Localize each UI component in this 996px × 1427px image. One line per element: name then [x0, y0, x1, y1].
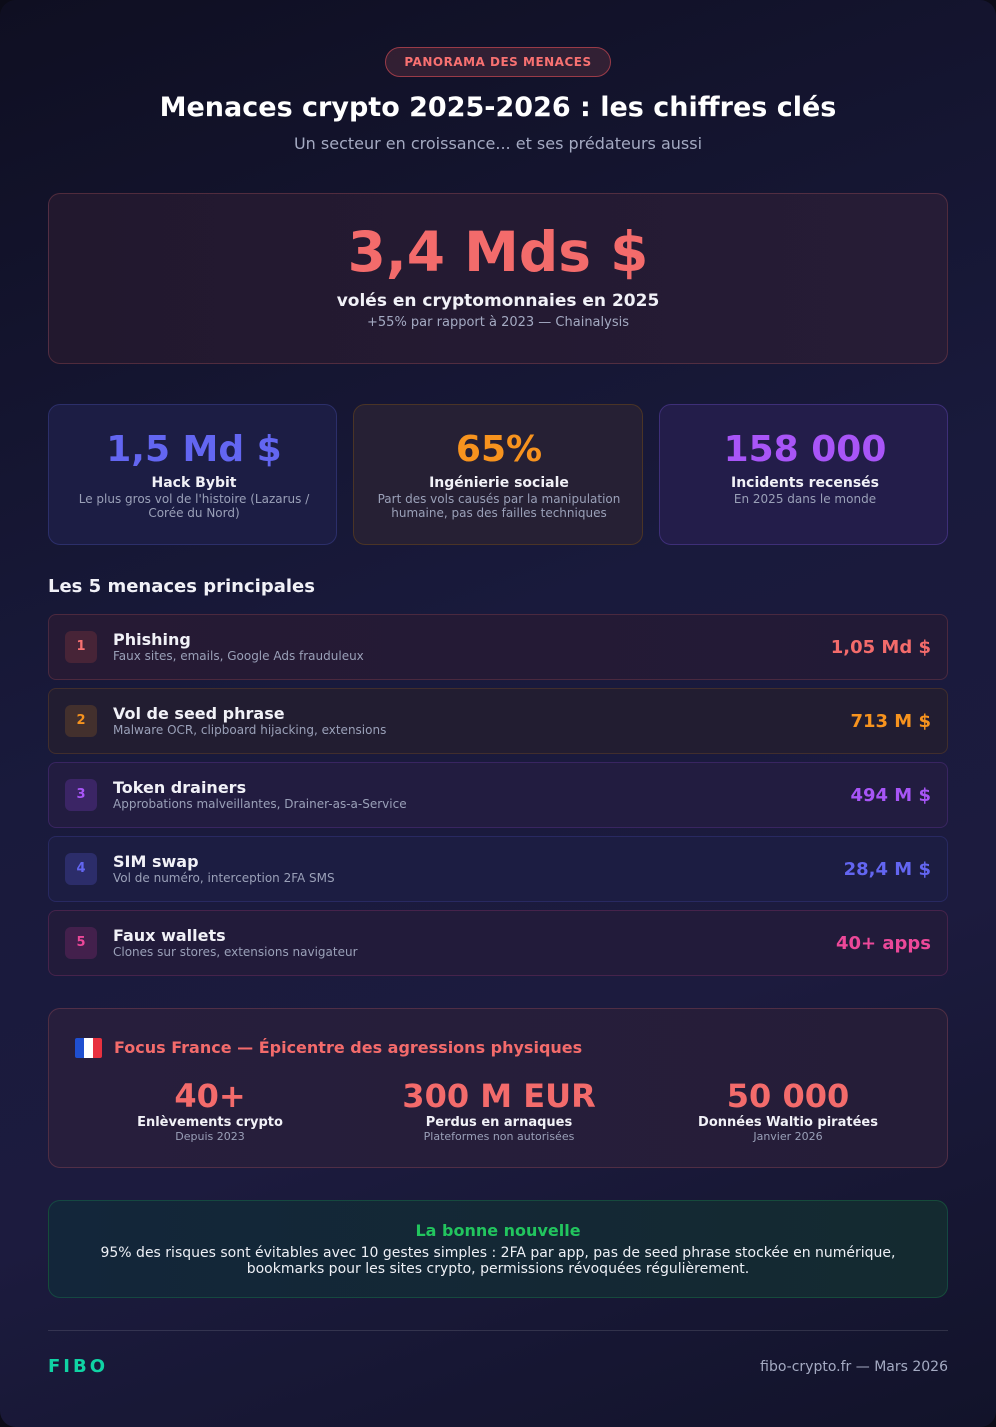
threat 2: 713 M $ — [850, 711, 931, 732]
threat 5: Clones sur stores, extensions navigateur — [113, 945, 358, 959]
threat 1: Faux sites, emails, Google Ads frauduleux — [113, 649, 364, 663]
card: Incidents: 158 000 — [724, 429, 886, 470]
panel: Focus France: Enlèvements crypto — [137, 1115, 283, 1130]
threat 4: Vol de numéro, interception 2FA SMS — [113, 871, 335, 885]
panel: Focus France: Depuis 2023 — [175, 1130, 245, 1143]
threat 4: SIM swap — [113, 852, 199, 871]
panel: Focus France: Plateformes non autorisées — [424, 1130, 574, 1143]
panel: good news: La bonne nouvelle — [415, 1221, 581, 1240]
threat 1: Phishing — [113, 630, 191, 649]
card: Incidents — [659, 404, 948, 545]
threat 2: Vol de seed phrase — [113, 704, 285, 723]
card: Incidents: En 2025 dans le monde — [734, 492, 876, 506]
footer source: fibo-crypto.fr — Mars 2026 — [760, 1359, 948, 1375]
threat 3: Token drainers — [113, 778, 246, 797]
card: Hack Bybit: Hack Bybit — [152, 475, 236, 491]
threat 3: 494 M $ — [850, 785, 931, 806]
threat 1: 1 — [76, 639, 86, 654]
card: Hack Bybit: Le plus gros vol de l'histoire (Lazarus / Corée du Nord) — [79, 492, 309, 520]
panel: good news: 95% des risques sont évitables avec 10 gestes simples : 2FA par app, pas de seed phrase stockée en numérique, bookmarks pour les sites crypto, permissions révoquées régulièrement. — [100, 1245, 896, 1277]
threat 2: 2 — [76, 713, 86, 728]
threat 4: 4 — [76, 861, 86, 876]
card: Ingénierie sociale: Part des vols causés par la manipulation humaine, pas des failles techniques — [378, 492, 620, 520]
threat 3: 3 — [76, 787, 86, 802]
footer logo: FIBO — [48, 1356, 108, 1377]
card: Ingénierie sociale: Ingénierie sociale — [429, 475, 569, 491]
panel: Focus France: Janvier 2026 — [753, 1130, 823, 1143]
subtitle: Un secteur en croissance... et ses prédateurs aussi — [294, 134, 702, 153]
threat 3: Approbations malveillantes, Drainer-as-a-Service — [113, 797, 407, 811]
threat 5: 40+ apps — [836, 933, 931, 954]
threat 3 — [48, 762, 948, 828]
threat 2: Malware OCR, clipboard hijacking, extensions — [113, 723, 386, 737]
hero stat panel: 3,4 Mds $ — [348, 220, 648, 284]
hero stat panel: volés en cryptomonnaies en 2025 — [337, 291, 659, 311]
panel: Focus France — [48, 1008, 948, 1168]
threat 5 — [48, 910, 948, 976]
threat 2 — [48, 688, 948, 754]
threat 4 — [48, 836, 948, 902]
panel: Focus France: Données Waltio piratées — [698, 1115, 878, 1130]
icon: French flag — [75, 1038, 102, 1058]
panel: Focus France: 40+ — [174, 1077, 246, 1115]
pill label — [385, 47, 611, 77]
threat 1 — [48, 614, 948, 680]
card: Incidents: Incidents recensés — [731, 475, 879, 491]
threat 1: 1,05 Md $ — [831, 637, 931, 658]
title: Menaces crypto 2025-2026 : les chiffres clés — [160, 92, 836, 123]
section heading: Les 5 menaces principales — [48, 576, 315, 597]
pill label: PANORAMA DES MENACES — [404, 55, 592, 69]
card: Ingénierie sociale: 65% — [456, 429, 542, 470]
panel: good news — [48, 1200, 948, 1298]
threat 5: Faux wallets — [113, 926, 226, 945]
panel: Focus France: Focus France — Épicentre des agressions physiques — [114, 1038, 582, 1057]
card: Ingénierie sociale — [353, 404, 643, 545]
threat 5: 5 — [76, 935, 86, 950]
panel: Focus France: 300 M EUR — [402, 1077, 596, 1115]
card: Hack Bybit: 1,5 Md $ — [106, 429, 282, 470]
hero stat panel: +55% par rapport à 2023 — Chainalysis — [367, 315, 629, 330]
panel: Focus France: 50 000 — [727, 1077, 849, 1115]
panel: Focus France: Perdus en arnaques — [426, 1115, 572, 1130]
card: Hack Bybit — [48, 404, 337, 545]
threat 4: 28,4 M $ — [844, 859, 931, 880]
hero stat panel — [48, 193, 948, 364]
